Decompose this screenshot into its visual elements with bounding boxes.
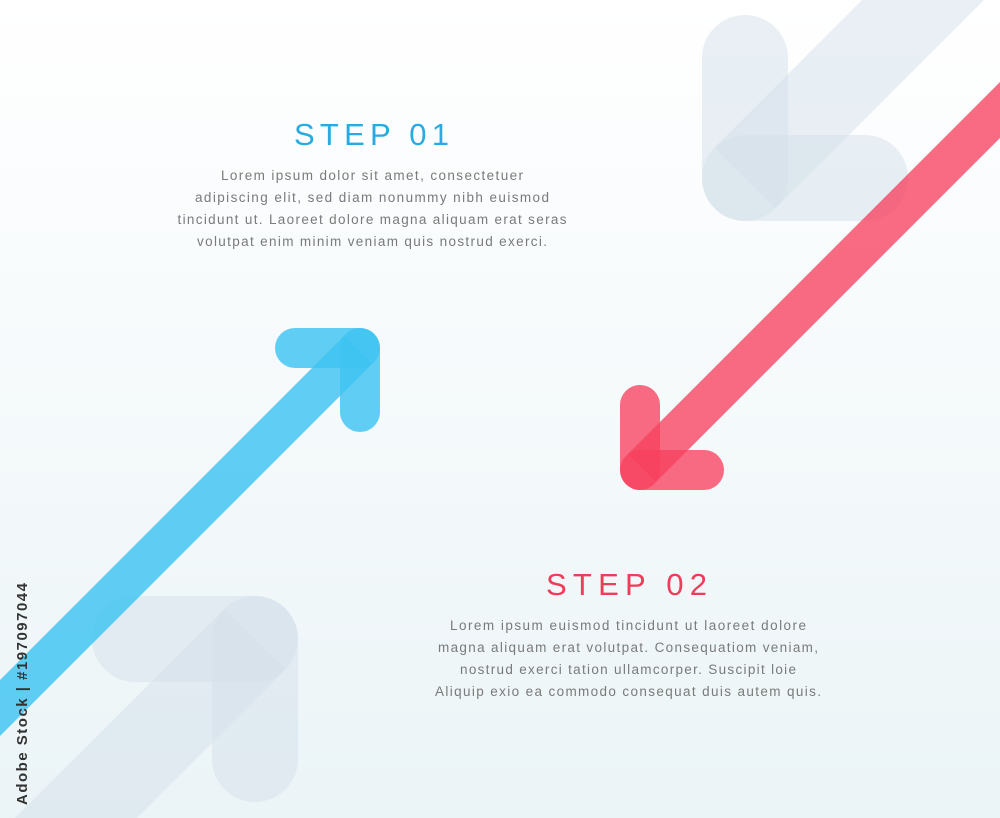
blue arrow up-right [0,328,380,736]
red arrow down-left [620,82,1000,490]
text block: step 02 [435,618,821,699]
faded arrow top-right [702,0,984,221]
text block: step 01: volutpat enim minim veniam quis nostrud exerci. [197,234,547,249]
text block: step 01 [178,168,567,249]
text block: step 01: tincidunt ut. Laoreet dolore magna aliquam erat seras [178,212,567,227]
heading: step 02: STEP 02 [546,567,712,602]
text block: step 02: Lorem ipsum euismod tincidunt ut laoreet dolore [450,618,806,633]
text block: step 01: adipiscing elit, sed diam nonummy nibh euismod [195,190,549,205]
text block: step 02: Aliquip exio ea commodo consequat duis autem quis. [435,684,821,699]
watermark id text: Adobe Stock | #197097044 [14,582,31,805]
faded arrow bottom-left [15,596,298,818]
text block: step 02: magna aliquam erat volutpat. Consequatiom veniam, [438,640,818,655]
heading: step 01: STEP 01 [294,117,454,152]
text block: step 02: nostrud exerci tation ullamcorper. Suscipit loie [460,662,796,677]
text block: step 01: Lorem ipsum dolor sit amet, consectetuer [221,168,524,183]
